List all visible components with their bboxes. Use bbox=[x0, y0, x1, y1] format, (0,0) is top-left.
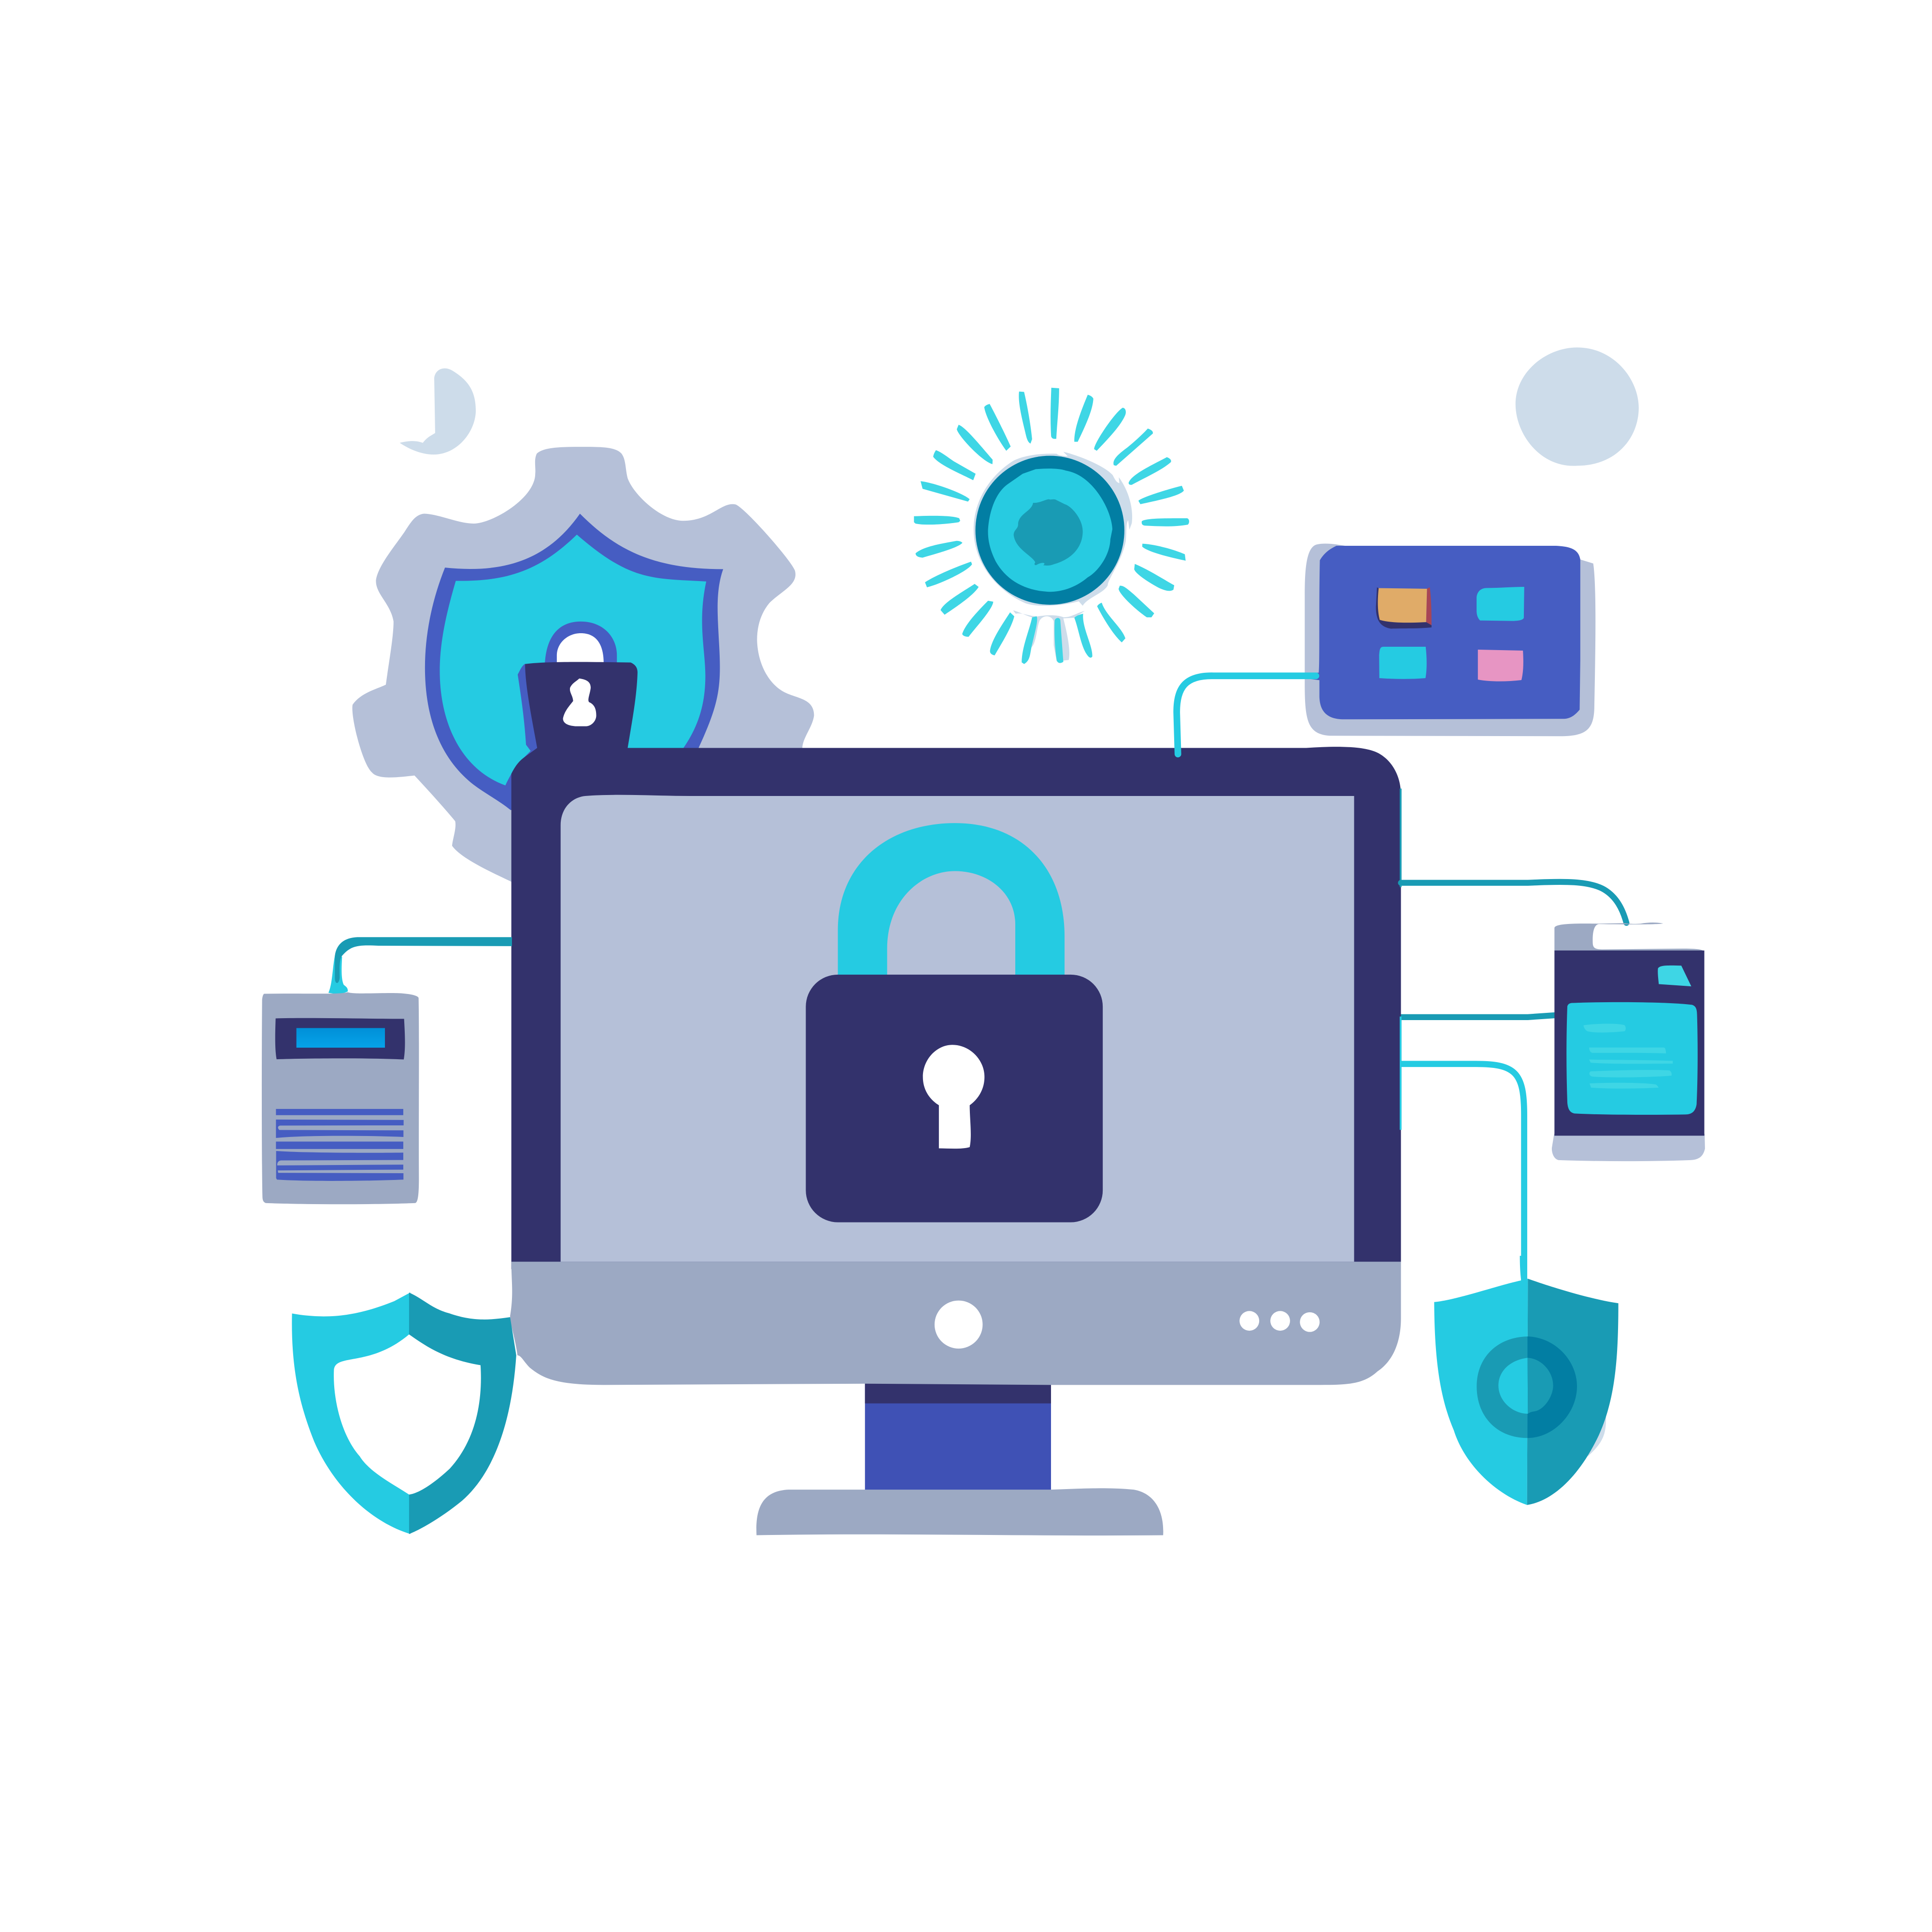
right shield bbox=[1434, 1256, 1619, 1505]
small padlock body bbox=[525, 662, 646, 785]
tile: pink bbox=[1478, 650, 1523, 682]
shackle bbox=[838, 823, 1065, 980]
small padlock shackle bbox=[545, 622, 617, 665]
indicator dots bbox=[1239, 1311, 1320, 1332]
device body bbox=[1554, 951, 1705, 1136]
shield outer bbox=[425, 514, 723, 810]
left device bbox=[262, 937, 512, 1204]
tablet back bbox=[1305, 544, 1595, 736]
core bbox=[1014, 499, 1083, 566]
device stripes bbox=[276, 1109, 404, 1181]
disc bbox=[988, 469, 1112, 592]
right half bbox=[409, 1293, 516, 1534]
right device bbox=[1552, 923, 1705, 1161]
ring bbox=[1477, 1336, 1577, 1438]
cable: monitor to right shield bbox=[1401, 1064, 1524, 1284]
gear bbox=[352, 447, 814, 882]
tile: tan bbox=[1376, 587, 1432, 629]
small padlock keyhole bbox=[563, 679, 596, 726]
small padlock side bbox=[518, 664, 539, 759]
connector foot bbox=[328, 956, 348, 994]
device body bbox=[262, 992, 419, 1204]
device screen bbox=[1566, 1002, 1698, 1115]
cable: monitor to device top bbox=[1401, 882, 1626, 923]
monitor bezel bbox=[510, 1262, 1401, 1385]
rays bbox=[914, 388, 1189, 664]
device display bbox=[275, 1018, 405, 1060]
monitor stand bbox=[865, 1380, 1051, 1491]
left half bbox=[1434, 1279, 1528, 1505]
power button bbox=[935, 1301, 982, 1349]
tablet with app tiles bbox=[1305, 544, 1595, 736]
device tag bbox=[1658, 966, 1691, 986]
sun-like target with rays bbox=[914, 388, 1189, 664]
right half bbox=[1527, 1279, 1619, 1505]
white inner bbox=[334, 1335, 481, 1494]
device base bbox=[1552, 1134, 1705, 1161]
large padlock bbox=[806, 823, 1103, 1222]
display screen bbox=[297, 1028, 385, 1048]
shield inner bbox=[440, 535, 706, 785]
cable: tablet to monitor bbox=[1177, 676, 1316, 754]
ring bbox=[976, 456, 1124, 605]
keyhole bbox=[923, 1045, 984, 1149]
shadow tail bbox=[1588, 1413, 1606, 1457]
tile: cyan top right bbox=[1477, 587, 1524, 621]
device tab bbox=[1554, 923, 1704, 951]
cable: monitor to device side bbox=[1401, 1015, 1555, 1017]
monitor frame bbox=[511, 747, 1401, 1269]
tile: cyan bottom left bbox=[1379, 647, 1427, 679]
gear with shield and padlock bbox=[352, 369, 814, 882]
cable bbox=[335, 937, 512, 983]
body bbox=[806, 975, 1103, 1222]
device text lines bbox=[1583, 1023, 1673, 1089]
monitor edge slivers bbox=[1400, 789, 1402, 1130]
monitor screen bbox=[561, 795, 1354, 1262]
halo bbox=[974, 452, 1132, 606]
decorative circle: top right bbox=[1516, 347, 1639, 466]
monitor base bbox=[756, 1488, 1163, 1535]
monitor bbox=[510, 676, 1626, 1535]
cable stub bbox=[1520, 1256, 1528, 1280]
center bbox=[1498, 1358, 1553, 1414]
tablet front bbox=[1307, 546, 1580, 719]
moon shape bbox=[400, 369, 476, 455]
left half bbox=[292, 1293, 410, 1534]
left shield bbox=[292, 1293, 516, 1534]
lower halo bbox=[1013, 611, 1085, 661]
